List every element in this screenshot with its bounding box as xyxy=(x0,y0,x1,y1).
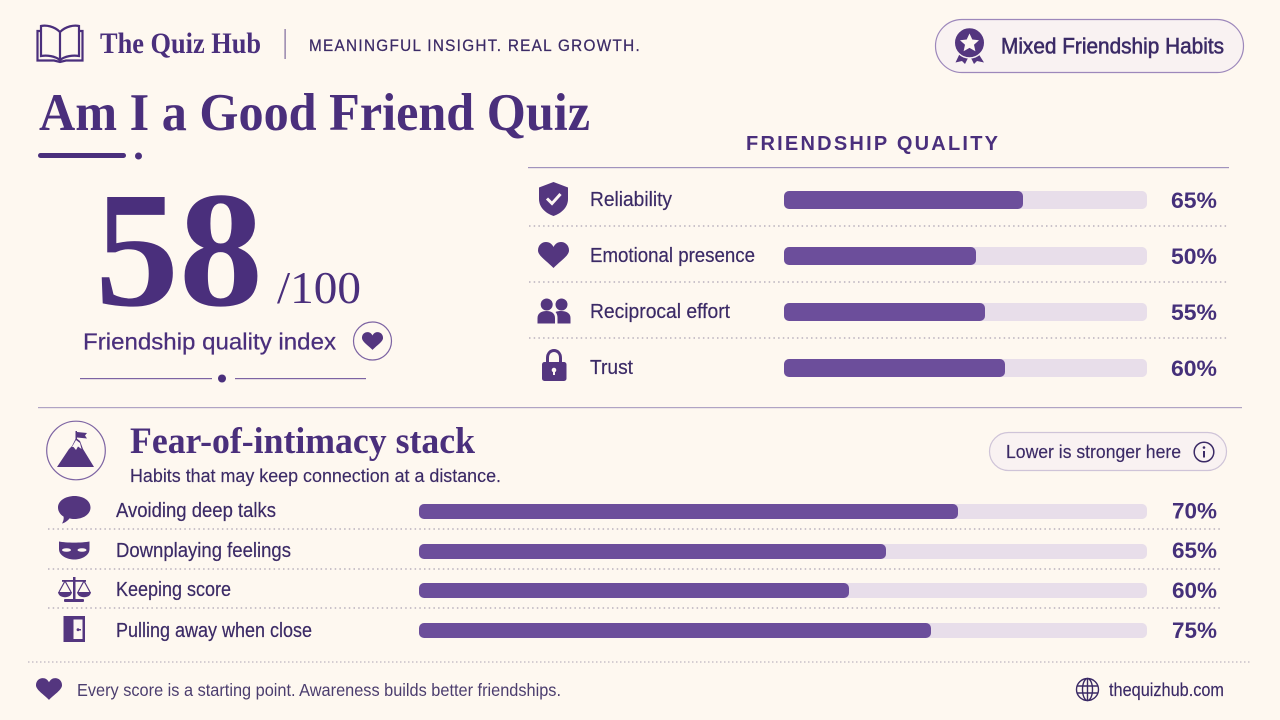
note pill xyxy=(990,432,1226,470)
row: keeping score: 60% xyxy=(1172,578,1217,603)
note pill: Lower is stronger here xyxy=(1006,442,1181,462)
badge: mixed friendship habits: Mixed Friendship Habits xyxy=(1001,34,1224,58)
row: avoiding deep talks: 70% xyxy=(1172,498,1217,524)
row: pulling away when close: Pulling away when close xyxy=(116,620,312,642)
row: emotional presence: 50% xyxy=(1171,244,1217,269)
row: downplaying feelings: Downplaying feelings xyxy=(116,540,291,562)
website: thequizhub.com xyxy=(1109,680,1224,700)
icon: info xyxy=(1194,442,1214,462)
row: pulling away when close: 75% xyxy=(1172,618,1217,643)
row: emotional presence xyxy=(538,242,1217,269)
row: trust xyxy=(542,350,1217,381)
icon: footer heart xyxy=(36,678,62,700)
row: reliability: Reliability xyxy=(590,189,672,211)
row: trust: 60% xyxy=(1171,356,1217,381)
icon: award ribbon xyxy=(954,28,985,64)
footer message: Every score is a starting point. Awareness builds better friendships. xyxy=(77,680,561,700)
tagline: MEANINGFUL INSIGHT. REAL GROWTH. xyxy=(309,37,641,55)
score label: Friendship quality index xyxy=(83,328,336,354)
section subheading: Habits that may keep connection at a distance. xyxy=(130,466,501,486)
panel: fear-of-intimacy stack xyxy=(47,421,1227,643)
row: reliability xyxy=(539,182,1217,216)
row: reliability: 65% xyxy=(1171,188,1217,213)
icon: heart in circle xyxy=(354,322,392,360)
score: 58 out of 100: 58 xyxy=(95,158,263,341)
section heading: Fear-of-intimacy stack xyxy=(130,421,475,462)
row: keeping score: Keeping score xyxy=(116,579,231,601)
row: downplaying feelings xyxy=(59,538,1217,563)
icon: open book logo xyxy=(38,26,82,62)
panel: friendship quality xyxy=(528,133,1229,381)
title: Am I a Good Friend Quiz xyxy=(39,84,590,142)
badge: mixed friendship habits xyxy=(936,20,1244,72)
row: emotional presence: Emotional presence xyxy=(590,245,755,267)
score divider xyxy=(80,374,366,382)
row: reciprocal effort xyxy=(538,298,1217,325)
row: reciprocal effort: 55% xyxy=(1171,300,1217,325)
title underline accent xyxy=(38,152,142,160)
row: avoiding deep talks xyxy=(58,496,1217,524)
score: 58 out of 100: /100 xyxy=(277,263,361,313)
row: avoiding deep talks: Avoiding deep talks xyxy=(116,500,276,522)
icon: globe xyxy=(1076,678,1098,700)
section divider xyxy=(38,407,1242,408)
row: keeping score xyxy=(58,577,1217,603)
brand name: The Quiz Hub xyxy=(100,27,261,60)
row: pulling away when close xyxy=(64,616,1217,643)
footer xyxy=(28,662,1250,700)
row: reciprocal effort: Reciprocal effort xyxy=(590,301,730,323)
score: 58 out of 100 xyxy=(95,158,361,341)
icon: mountain flag in circle xyxy=(47,421,105,480)
panel heading: FRIENDSHIP QUALITY xyxy=(746,133,999,155)
row: trust: Trust xyxy=(590,357,633,379)
row: downplaying feelings: 65% xyxy=(1172,538,1217,563)
